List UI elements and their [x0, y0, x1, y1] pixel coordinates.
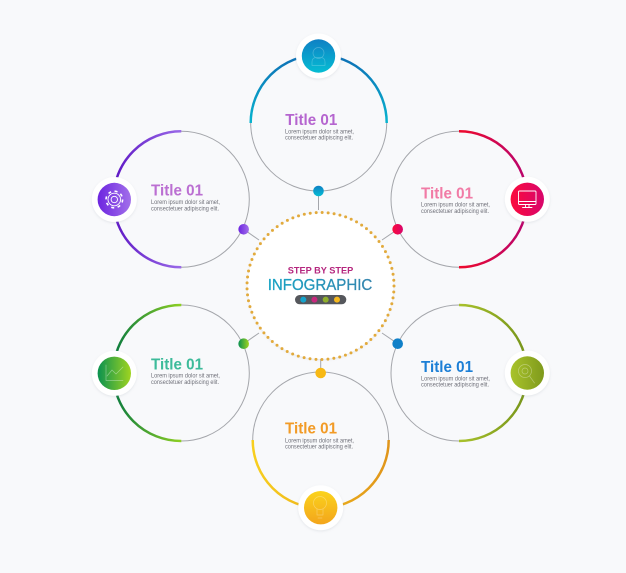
- connector dot: [392, 338, 403, 349]
- body text: consectetuer adipiscing elit.: [285, 444, 353, 451]
- panel: lower right step, olive: [391, 305, 550, 441]
- body text: consectetuer adipiscing elit.: [151, 205, 219, 212]
- title: Title 01: [151, 183, 203, 200]
- title: Title 01: [285, 421, 337, 438]
- dotted ring: [247, 212, 394, 360]
- white disc: [248, 213, 394, 359]
- body text: consectetuer adipiscing elit.: [285, 135, 353, 142]
- body text: [421, 375, 490, 389]
- body text: [421, 202, 490, 215]
- heading: infographic: INFOGRAPHIC: [268, 277, 372, 294]
- connector dot: [238, 338, 249, 349]
- body text: [151, 373, 220, 386]
- connector dot: [392, 224, 403, 235]
- title: Title 01: [421, 185, 473, 202]
- body text: [285, 437, 354, 451]
- connector dot: [238, 224, 249, 235]
- body text: consectetuer adipiscing elit.: [421, 382, 489, 389]
- coloured arc: [253, 440, 389, 508]
- icon: person: [296, 34, 341, 78]
- icon: gear: [92, 177, 137, 222]
- connector dot: [313, 186, 324, 196]
- body text: [151, 199, 220, 212]
- grey ring: [251, 55, 387, 191]
- connector dot: [315, 368, 326, 378]
- coloured arc: [251, 55, 387, 123]
- body text: consectetuer adipiscing elit.: [421, 208, 489, 215]
- panel: bottom step, yellow: [253, 368, 389, 530]
- grey ring: [391, 131, 527, 267]
- grey ring: [391, 305, 527, 441]
- connector lines: [244, 191, 398, 373]
- icon: light bulb: [298, 485, 343, 530]
- grey ring: [113, 131, 249, 267]
- title: Title 01: [151, 356, 203, 374]
- panel: top step, blue: [251, 34, 387, 196]
- icon: monitor: [505, 177, 550, 222]
- body text: [285, 128, 354, 142]
- coloured arc: [459, 305, 527, 441]
- title: Title 01: [285, 112, 337, 129]
- icon: magnifier: [505, 350, 550, 396]
- body text: Lorem ipsum dolor sit amet,: [421, 375, 490, 382]
- icon: line chart: [92, 351, 137, 396]
- colour dots pill: [295, 295, 346, 304]
- coloured arc: [113, 305, 181, 441]
- body text: Lorem ipsum dolor sit amet,: [421, 202, 490, 209]
- body text: Lorem ipsum dolor sit amet,: [285, 128, 354, 135]
- body text: Lorem ipsum dolor sit amet,: [151, 373, 220, 380]
- panel: lower left step, green: [92, 305, 249, 441]
- coloured arc: [113, 131, 181, 267]
- heading: step by step: STEP BY STEP: [288, 265, 354, 276]
- panel: upper right step, red: [391, 131, 550, 267]
- grey ring: [113, 305, 249, 441]
- body text: Lorem ipsum dolor sit amet,: [151, 199, 220, 206]
- panel: upper left step, purple: [92, 131, 249, 267]
- panel: central hub: [247, 212, 394, 360]
- title: Title 01: [421, 359, 473, 376]
- grey ring: [253, 372, 389, 508]
- body text: Lorem ipsum dolor sit amet,: [285, 437, 354, 444]
- coloured arc: [459, 131, 527, 267]
- body text: consectetuer adipiscing elit.: [151, 379, 219, 386]
